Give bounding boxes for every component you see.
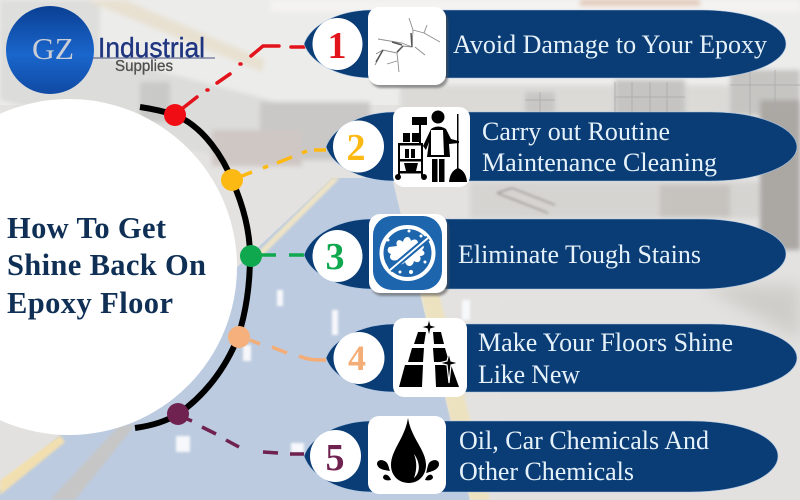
node dots xyxy=(164,104,262,425)
panel: step 3: 3 xyxy=(326,236,344,278)
connector 1 xyxy=(183,46,304,108)
icon: shiny road xyxy=(393,318,467,397)
logo: GZ Industrial Supplies xyxy=(6,6,215,94)
title: Shine Back On xyxy=(7,248,206,282)
title: How To Get xyxy=(7,211,167,245)
label: Other Chemicals xyxy=(459,457,634,486)
connector 4 xyxy=(250,340,326,360)
panel: step 1: 1 xyxy=(328,25,346,67)
connector 2 xyxy=(242,150,326,176)
title: Epoxy Floor xyxy=(7,286,173,320)
logo: GZ Industrial Supplies: GZ xyxy=(32,31,74,66)
icon: no stains xyxy=(369,214,447,293)
panel: step 5 xyxy=(304,416,778,494)
connector 5 xyxy=(187,419,304,454)
panel: step 1 xyxy=(304,7,786,85)
title circle xyxy=(0,99,237,435)
label: Maintenance Cleaning xyxy=(482,148,717,177)
label: Like New xyxy=(478,360,580,389)
panel: step 5: 5 xyxy=(326,437,344,479)
label: Carry out Routine xyxy=(482,117,670,146)
logo: GZ Industrial Supplies: Industrial xyxy=(98,32,205,63)
panel: step 4: 4 xyxy=(348,338,366,378)
icon: cracked surface xyxy=(368,7,446,85)
blue floor xyxy=(0,178,470,500)
panel: step 2 xyxy=(326,107,797,187)
icon: cleaner with cart xyxy=(393,107,470,187)
label: Oil, Car Chemicals And xyxy=(459,426,709,455)
label: Avoid Damage to Your Epoxy xyxy=(453,30,767,59)
label: Make Your Floors Shine xyxy=(478,328,733,357)
label: Eliminate Tough Stains xyxy=(458,240,701,269)
panel: step 2: 2 xyxy=(346,127,366,169)
connector 3 xyxy=(260,253,304,257)
logo: GZ Industrial Supplies: Supplies xyxy=(115,58,173,75)
panel: step 4 xyxy=(326,318,797,397)
timeline arc xyxy=(135,107,250,428)
panel: step 3 xyxy=(304,214,786,293)
icon: oil drop xyxy=(368,416,446,494)
